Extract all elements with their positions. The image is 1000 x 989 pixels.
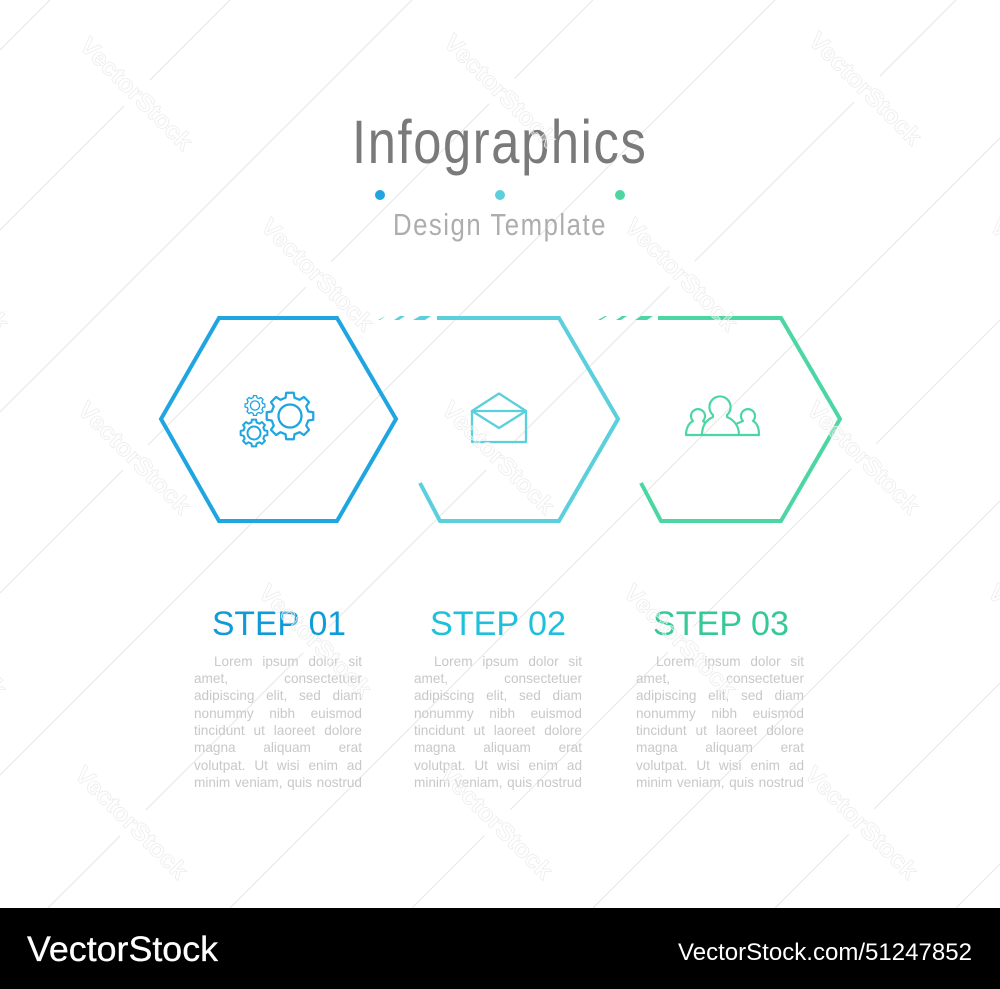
step 1 body text: tincidunt ut laoreet dolore bbox=[194, 723, 362, 738]
step 3 body text: amet, consectetuer bbox=[636, 671, 804, 686]
step 2 body text: minim veniam, quis nostrud bbox=[414, 775, 582, 790]
watermarks: VectorStock bbox=[801, 396, 925, 520]
step 3 body text: tincidunt ut laoreet dolore bbox=[636, 723, 804, 738]
step 2 body text: Lorem ipsum dolor sit bbox=[434, 654, 582, 668]
step 2 heading: STEP 02 bbox=[430, 605, 566, 643]
step 2 body text: nonummy nibh euismod bbox=[414, 706, 582, 721]
step 3 body text: minim veniam, quis nostrud bbox=[636, 775, 804, 790]
step 3 body text: nonummy nibh euismod bbox=[636, 706, 804, 721]
icon: gears bbox=[241, 393, 313, 446]
watermarks: VectorStock bbox=[253, 579, 377, 703]
icon: open envelope bbox=[472, 394, 526, 442]
watermarks: VectorStock bbox=[438, 29, 562, 153]
watermarks: VectorStock bbox=[799, 761, 923, 885]
icon: three people bbox=[686, 396, 759, 435]
footer bar bbox=[0, 908, 1000, 989]
step 3 body text: volutpat. Ut wisi enim ad bbox=[636, 758, 804, 773]
step 2 body text: adipiscing elit, sed diam bbox=[414, 688, 582, 703]
watermarks: VectorStock bbox=[72, 396, 196, 520]
watermarks: VectorStock bbox=[618, 579, 742, 703]
watermarks: VectorStock bbox=[74, 32, 198, 156]
watermarks: VectorStock bbox=[255, 213, 379, 337]
step 2 body text bbox=[414, 654, 582, 790]
step 3 body text bbox=[636, 654, 804, 790]
footer bar: VectorStock bbox=[27, 930, 219, 969]
watermarks: VectorStock bbox=[436, 396, 560, 520]
step 2 body text: magna aliquam erat bbox=[414, 740, 582, 755]
step 1 body text: nonummy nibh euismod bbox=[194, 706, 362, 721]
watermarks: VectorStock bbox=[619, 213, 743, 337]
subtitle: Design Template bbox=[393, 208, 605, 243]
step 1 body text bbox=[194, 654, 362, 790]
footer bar: VectorStock.com/51247852 bbox=[678, 939, 972, 966]
step 3 body text: adipiscing elit, sed diam bbox=[636, 688, 804, 703]
watermarks: VectorStock bbox=[803, 27, 927, 151]
step 3 body text: Lorem ipsum dolor sit bbox=[656, 654, 804, 668]
title: Infographics bbox=[352, 108, 646, 176]
step 1 body text: adipiscing elit, sed diam bbox=[194, 688, 362, 703]
hexagon: step 3 bbox=[598, 316, 840, 521]
step 2 body text: tincidunt ut laoreet dolore bbox=[414, 723, 582, 738]
title dots bbox=[375, 190, 625, 200]
watermarks: VectorStock bbox=[434, 761, 558, 885]
watermarks: VectorStock bbox=[69, 761, 193, 885]
step 1 body text: volutpat. Ut wisi enim ad bbox=[194, 758, 362, 773]
step 1 body text: minim veniam, quis nostrud bbox=[194, 775, 362, 790]
step 1 body text: amet, consectetuer bbox=[194, 671, 362, 686]
step 1 body text: magna aliquam erat bbox=[194, 740, 362, 755]
step 3 heading: STEP 03 bbox=[653, 605, 789, 643]
step 3 body text: magna aliquam erat bbox=[636, 740, 804, 755]
hexagon: step 1 bbox=[161, 318, 396, 521]
step 2 body text: volutpat. Ut wisi enim ad bbox=[414, 758, 582, 773]
hexagon: step 2 bbox=[378, 316, 618, 521]
step 1 body text: Lorem ipsum dolor sit bbox=[214, 654, 362, 668]
step 2 body text: amet, consectetuer bbox=[414, 671, 582, 686]
step 1 heading: STEP 01 bbox=[212, 605, 346, 643]
